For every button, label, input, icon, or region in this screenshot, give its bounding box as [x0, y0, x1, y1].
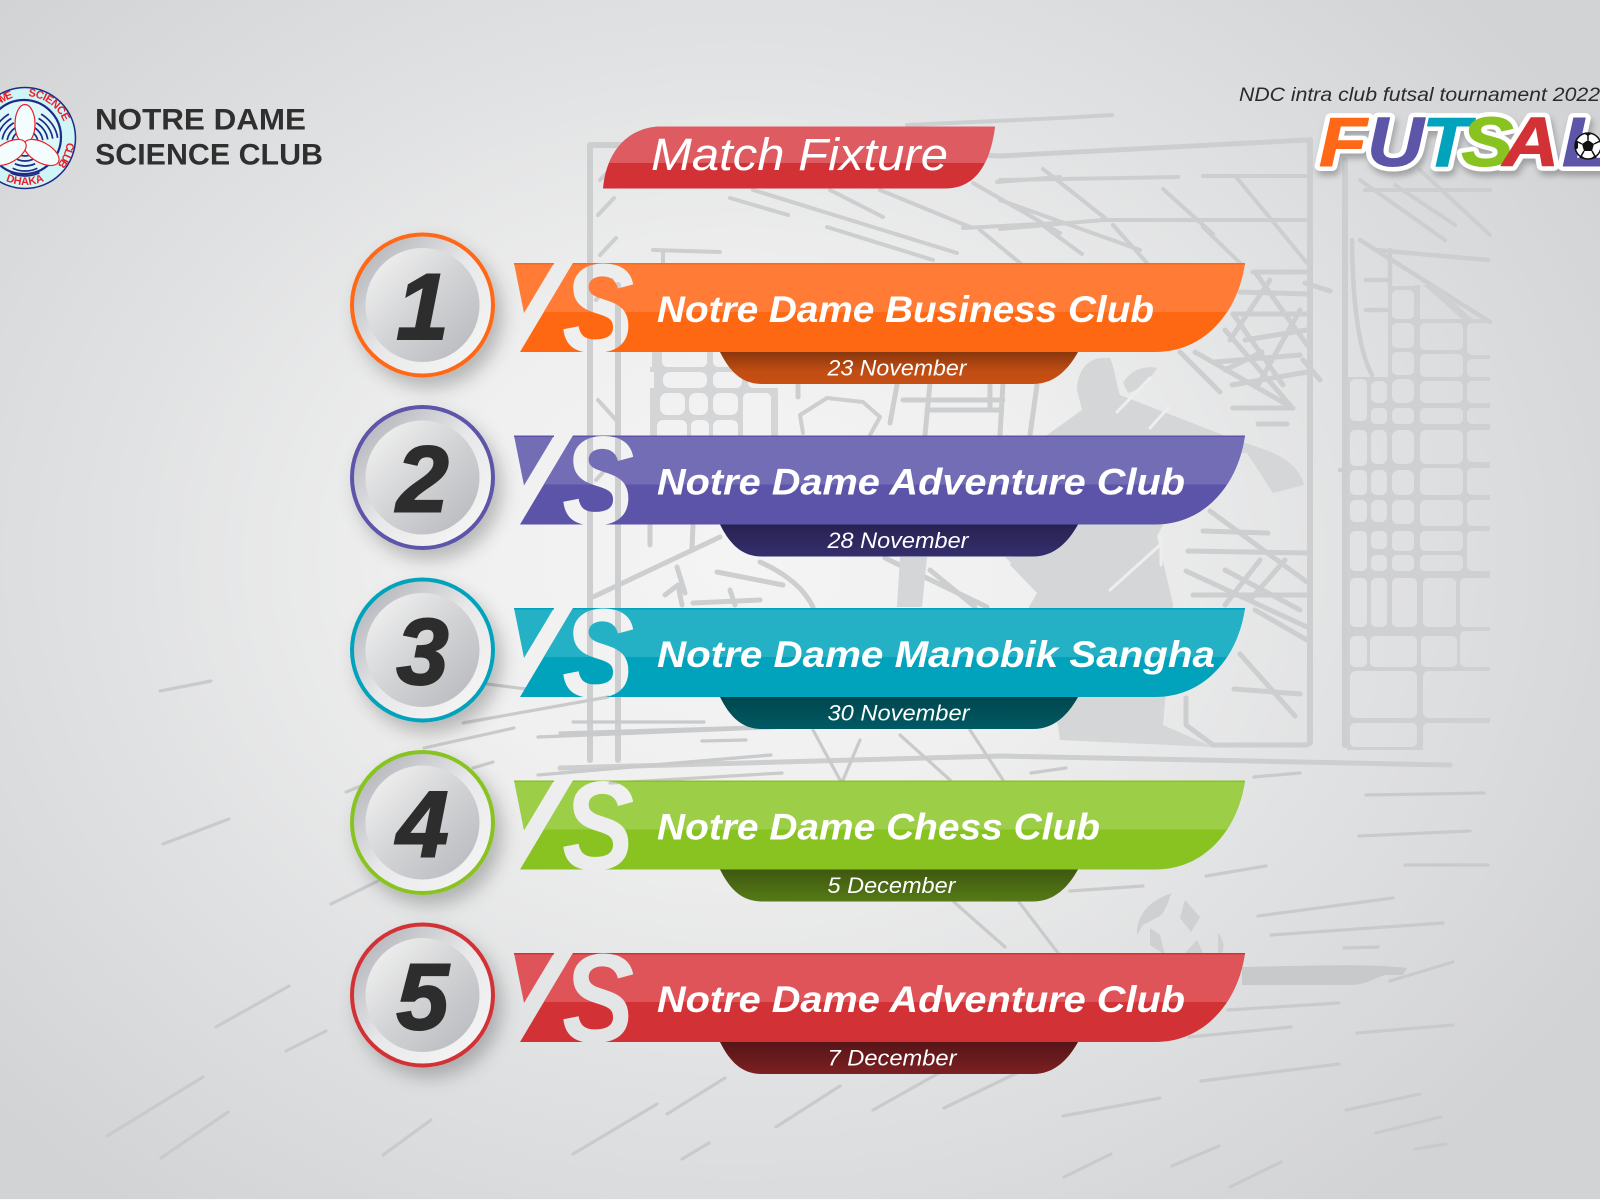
date tab 5	[720, 1042, 1078, 1074]
fixture row 2	[352, 407, 1245, 556]
goal net and player sketch	[107, 115, 1490, 1187]
icon: soccer ball	[1575, 132, 1600, 159]
futsal logo: F	[1319, 103, 1369, 181]
fixture row 1	[352, 234, 1245, 384]
club logo: DHAKA	[6, 174, 44, 185]
futsal logo: U	[1367, 103, 1426, 181]
VS banner 2	[514, 436, 1245, 524]
futsal logo: S	[1461, 103, 1514, 181]
date tab 4: 5 December	[828, 873, 957, 898]
futsal logo: A	[1501, 103, 1559, 181]
number badge 5	[352, 924, 493, 1066]
heading: Match Fixture	[603, 126, 995, 188]
VS banner 5: Notre Dame Adventure Club	[657, 979, 1185, 1020]
number badge 3: 3	[396, 599, 449, 704]
date tab 2	[720, 524, 1078, 556]
number badge 1	[352, 234, 493, 376]
heading: Match Fixture: Match Fixture	[651, 129, 948, 180]
streaks	[107, 681, 1488, 1187]
VS banner 2: Notre Dame Adventure Club	[657, 462, 1185, 502]
left goal mesh	[650, 352, 778, 437]
fixture row 3	[352, 580, 1245, 729]
futsal logo: S	[1461, 103, 1514, 181]
date tab 1: 23 November	[826, 356, 968, 380]
goal frame	[560, 115, 1450, 768]
VS banner 3	[514, 608, 1245, 697]
VS banner 5	[514, 953, 1245, 1042]
number badge 1: 1	[396, 254, 449, 359]
futsal logo: T	[1422, 103, 1476, 181]
club name	[95, 104, 323, 172]
top net strands	[653, 169, 1490, 263]
futsal logo: U	[1367, 103, 1426, 181]
player silhouette	[897, 358, 1304, 747]
number badge 4	[352, 752, 493, 893]
date tab 5: 7 December	[828, 1046, 958, 1070]
club logo	[0, 86, 76, 190]
right-of-band mesh	[1180, 272, 1330, 745]
date tab 4	[720, 870, 1078, 902]
futsal logo: T	[1422, 103, 1476, 181]
right goal net	[1340, 240, 1490, 470]
ground smear	[1242, 965, 1407, 985]
futsal logo: A	[1501, 103, 1559, 181]
club name: SCIENCE CLUB	[95, 138, 323, 172]
futsal logo	[1319, 103, 1600, 181]
VS banner 1: Notre Dame Business Club	[657, 289, 1154, 330]
number badge 3	[352, 580, 493, 720]
player highlights	[1110, 378, 1168, 590]
club logo: SCIENCE	[28, 88, 70, 122]
VS banner 4	[514, 780, 1245, 870]
club name: NOTRE DAME	[95, 104, 306, 136]
fixture row 5	[352, 924, 1245, 1074]
number badge 2	[352, 407, 493, 548]
fixture row 4	[352, 752, 1245, 902]
tournament caption: NDC intra club futsal tournament 2022	[1239, 85, 1600, 106]
number badge 5: 5	[396, 944, 450, 1049]
left lower strands	[593, 383, 1037, 607]
right goal net cells	[1347, 285, 1490, 750]
club logo: CLUB	[58, 143, 74, 168]
date tab 2: 28 November	[826, 528, 970, 553]
number badge 4: 4	[394, 772, 449, 876]
date tab 3: 30 November	[828, 700, 971, 726]
VS banner 1	[514, 263, 1245, 352]
soccer ball sketch	[1137, 893, 1223, 955]
futsal logo: F	[1319, 103, 1369, 181]
date tab 3	[720, 697, 1078, 729]
VS banner 4: Notre Dame Chess Club	[657, 806, 1100, 848]
date tab 1	[720, 352, 1078, 384]
VS banner 3: Notre Dame Manobik Sangha	[657, 634, 1215, 675]
number badge 2: 2	[394, 426, 449, 532]
